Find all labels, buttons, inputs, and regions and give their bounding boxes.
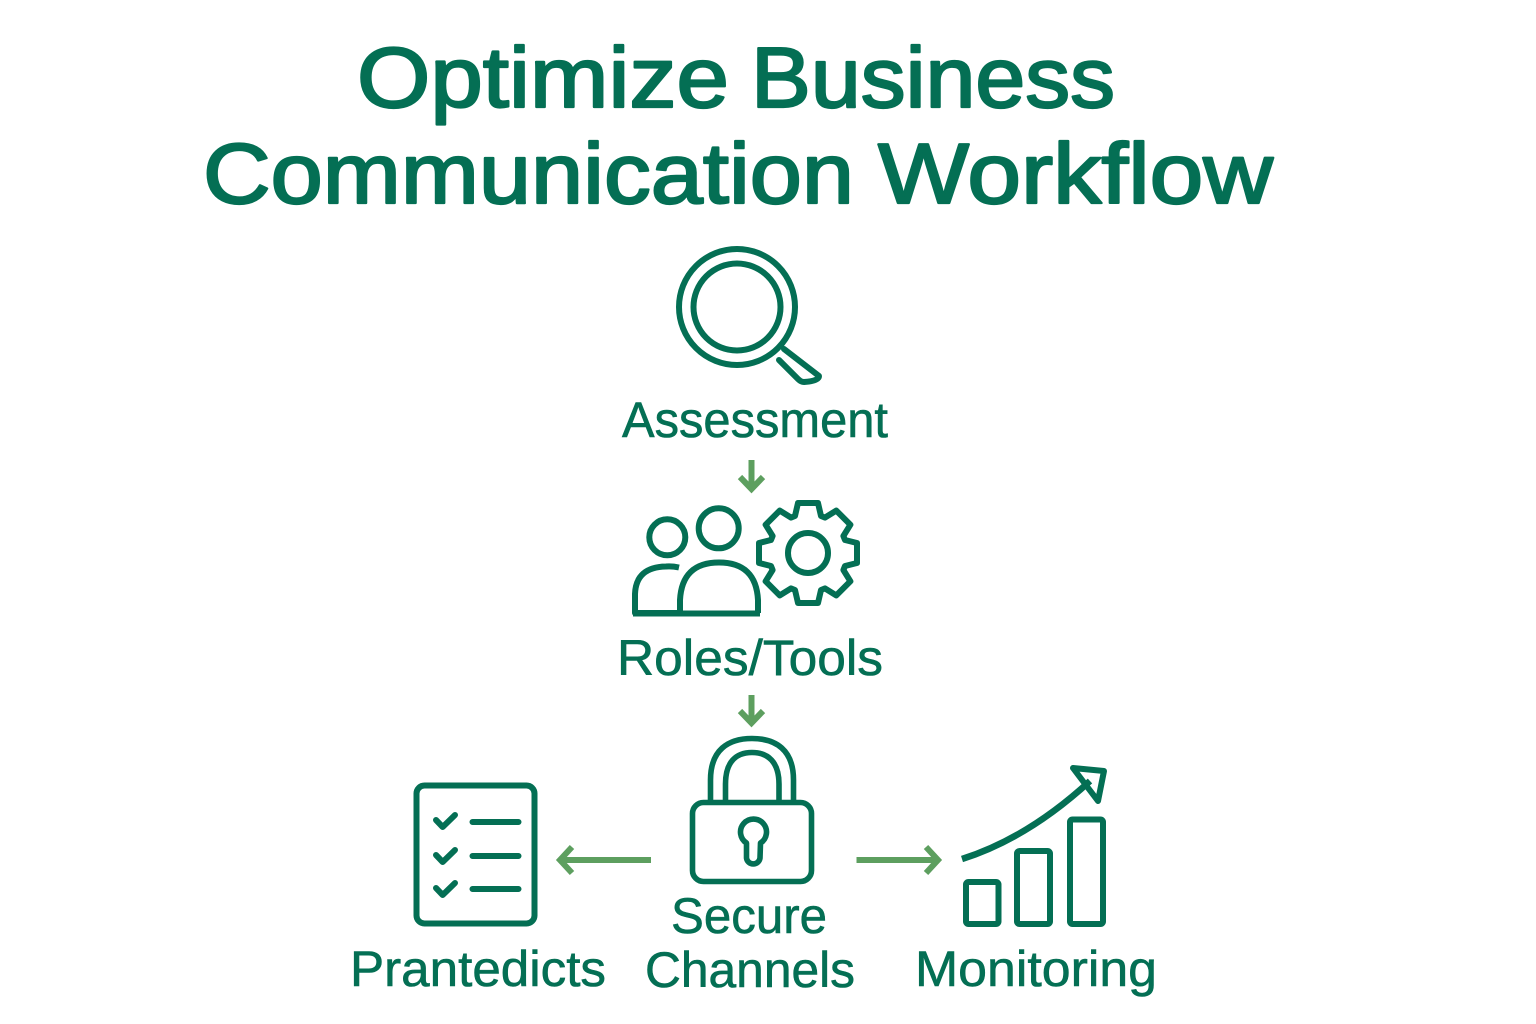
arrow: roles to secure channels bbox=[740, 695, 763, 723]
icon: padlock bbox=[692, 738, 812, 882]
label: Assessment: Assessment bbox=[622, 392, 888, 448]
label: Monitoring: Monitoring bbox=[915, 941, 1157, 997]
icon: rising bar chart bbox=[962, 768, 1104, 924]
label: Secure Channels bbox=[645, 888, 855, 998]
arrow: assessment to roles bbox=[740, 460, 763, 489]
arrow: secure channels to checklist bbox=[560, 847, 651, 873]
title: Workflow bbox=[878, 127, 1274, 222]
icon: people and gear bbox=[633, 503, 857, 614]
icon: magnifying glass bbox=[679, 249, 819, 382]
label: Roles/Tools: Roles/Tools bbox=[617, 630, 883, 686]
label: Secure Channels: Secure bbox=[671, 888, 827, 944]
title bbox=[203, 31, 1274, 222]
label: Secure Channels: Channels bbox=[645, 942, 855, 998]
label: Prantedicts: Prantedicts bbox=[350, 941, 606, 997]
icon: checklist bbox=[416, 786, 534, 924]
arrow: secure channels to monitoring bbox=[856, 847, 938, 873]
title: Business bbox=[751, 31, 1115, 126]
title: Communication bbox=[203, 127, 854, 222]
title: Optimize bbox=[357, 31, 729, 126]
